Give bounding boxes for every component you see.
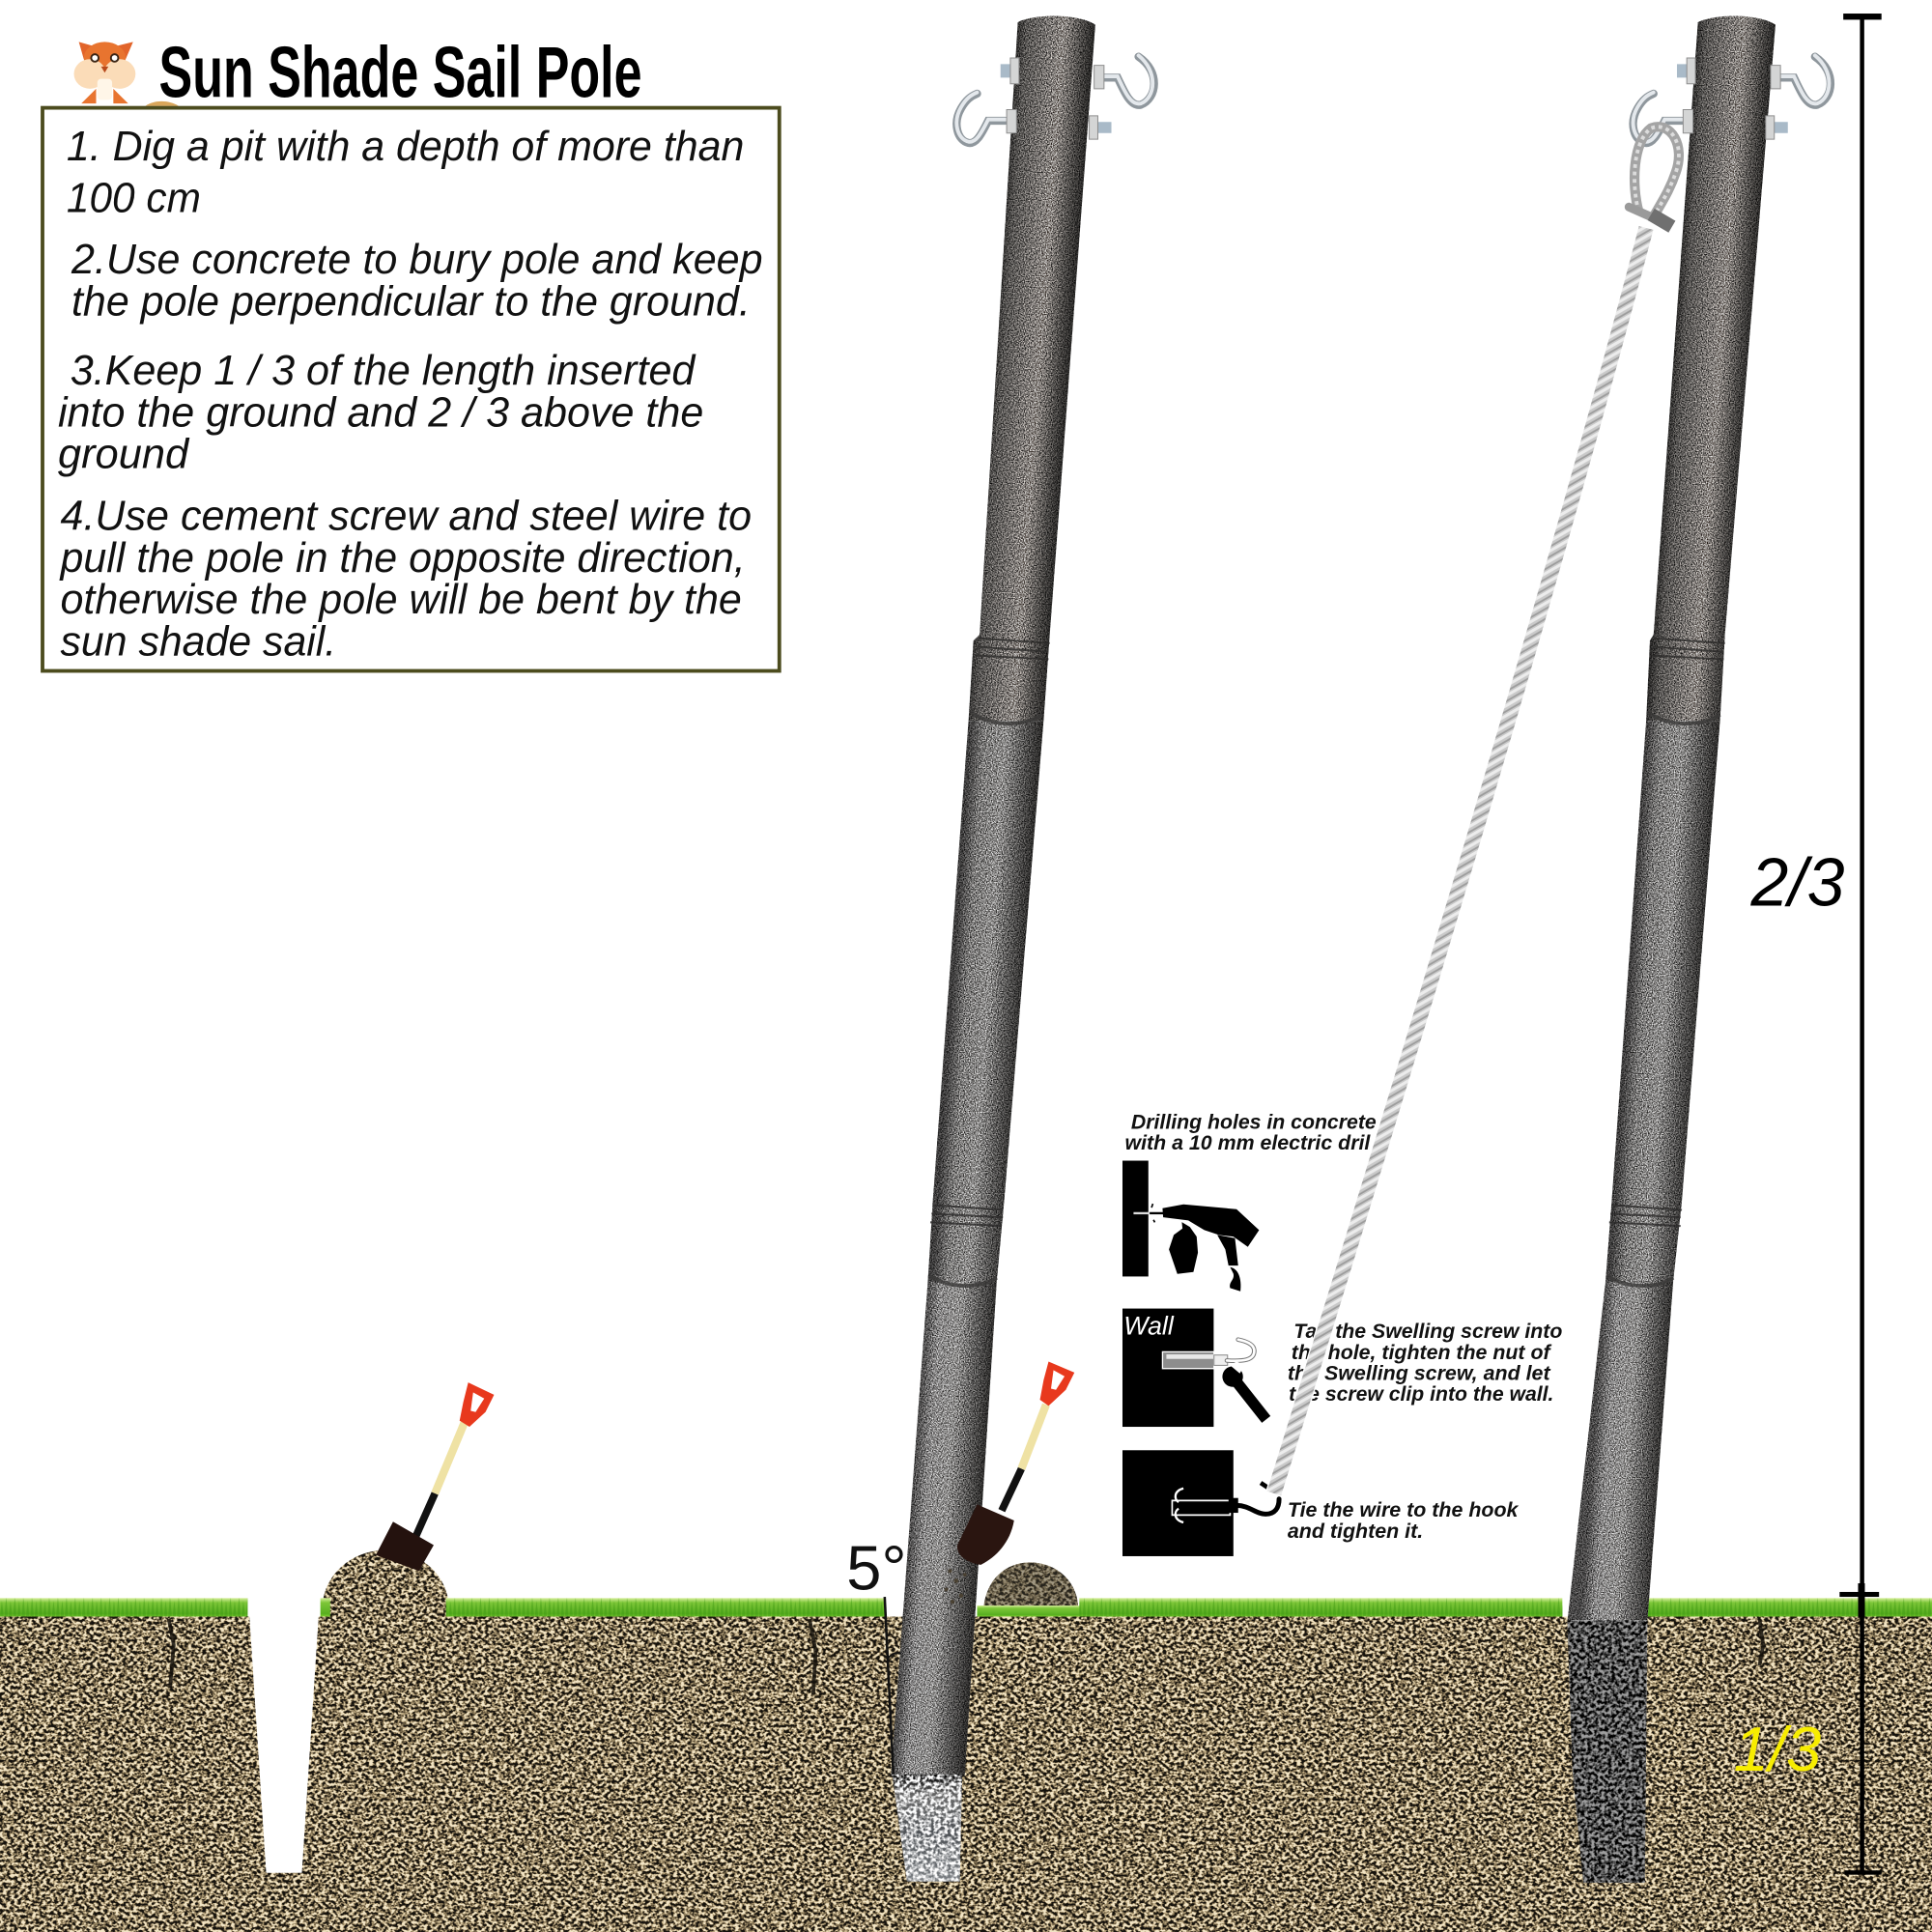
step 4	[59, 492, 752, 666]
panel: installation steps	[43, 108, 780, 671]
pole hooks and bolts	[1634, 55, 1831, 143]
steel wire cable	[1274, 127, 1679, 1493]
pole body	[891, 16, 1095, 1776]
icon: wall with hook anchor	[1122, 1450, 1279, 1556]
soil specks on pole	[945, 1569, 967, 1604]
grass strip	[0, 1598, 1932, 1616]
step 2	[71, 236, 763, 326]
drilling caption	[1125, 1111, 1377, 1154]
hook left	[956, 94, 1006, 143]
step 1: 100 cm	[67, 174, 201, 221]
instruction inset	[1122, 1111, 1562, 1556]
step 3: ground	[58, 431, 190, 478]
swelling screw instructions	[1288, 1321, 1562, 1406]
shovel in first mound	[376, 1382, 494, 1571]
swelling screw instructions: the hole, tighten the nut of	[1292, 1342, 1552, 1364]
drilling caption: Drilling holes in concrete	[1131, 1111, 1377, 1133]
hook instructions: and tighten it.	[1288, 1520, 1423, 1543]
two thirds label: 2/3	[1750, 843, 1844, 920]
hook left	[1634, 94, 1682, 143]
wall label: Wall	[1123, 1311, 1175, 1340]
step 1: 1. Dig a pit with a depth of more than	[67, 123, 744, 170]
cable clamp	[1629, 207, 1651, 216]
joint rings	[929, 639, 1050, 1286]
step 2: the pole perpendicular to the ground.	[71, 278, 751, 326]
step 1	[67, 123, 744, 221]
soil layer with mounds	[0, 1550, 1932, 1932]
hook right	[1776, 57, 1831, 105]
concrete section	[1567, 1620, 1647, 1883]
step 4: pull the pole in the opposite direction,	[59, 534, 746, 582]
swelling screw instructions: the screw clip into the wall.	[1289, 1383, 1553, 1406]
step 4: 4.Use cement screw and steel wire to	[60, 492, 752, 539]
nuts and bolts	[1001, 64, 1112, 133]
angle label: 5°	[846, 1532, 906, 1603]
hook instructions	[1288, 1499, 1520, 1543]
vertical pole	[1567, 16, 1831, 1883]
soil cracks	[169, 1619, 1763, 1694]
step 4: sun shade sail.	[60, 618, 336, 666]
pole body	[1567, 16, 1776, 1622]
hook instructions: Tie the wire to the hook	[1288, 1499, 1520, 1521]
dimension line	[1839, 14, 1882, 1875]
angled pole	[891, 16, 1154, 1882]
joint rings	[1606, 639, 1725, 1286]
swelling screw instructions: the Swelling screw, and let	[1288, 1363, 1551, 1385]
swelling screw instructions: Tap the Swelling screw into	[1293, 1321, 1562, 1343]
pit	[247, 1589, 321, 1873]
icon: wall and drill	[1122, 1161, 1259, 1292]
nuts and bolts	[1677, 64, 1788, 133]
drilling caption: with a 10 mm electric dril	[1125, 1132, 1372, 1154]
concrete section	[892, 1775, 962, 1882]
one third label: 1/3	[1734, 1714, 1821, 1784]
five degree angle marker	[846, 1532, 906, 1775]
title: Sun Shade Sail Pole	[159, 32, 642, 113]
step 2: 2.Use concrete to bury pole and keep	[71, 236, 763, 283]
icon: wall with expansion screw and wrench	[1122, 1309, 1266, 1427]
step 4: otherwise the pole will be bent by the	[60, 576, 742, 623]
step 3	[58, 347, 703, 478]
pole hooks and bolts	[956, 55, 1154, 143]
ground: soil, grass and pit	[0, 1550, 1932, 1932]
step 3: into the ground and 2 / 3 above the	[58, 388, 703, 436]
shovel beside angled pole	[957, 1361, 1074, 1565]
shaded second mound	[983, 1562, 1078, 1612]
mascot icon: chipmunk	[74, 42, 179, 106]
hook right	[1099, 57, 1154, 105]
cable loop	[1634, 127, 1679, 216]
step 3: 3.Keep 1 / 3 of the length inserted	[71, 347, 696, 394]
